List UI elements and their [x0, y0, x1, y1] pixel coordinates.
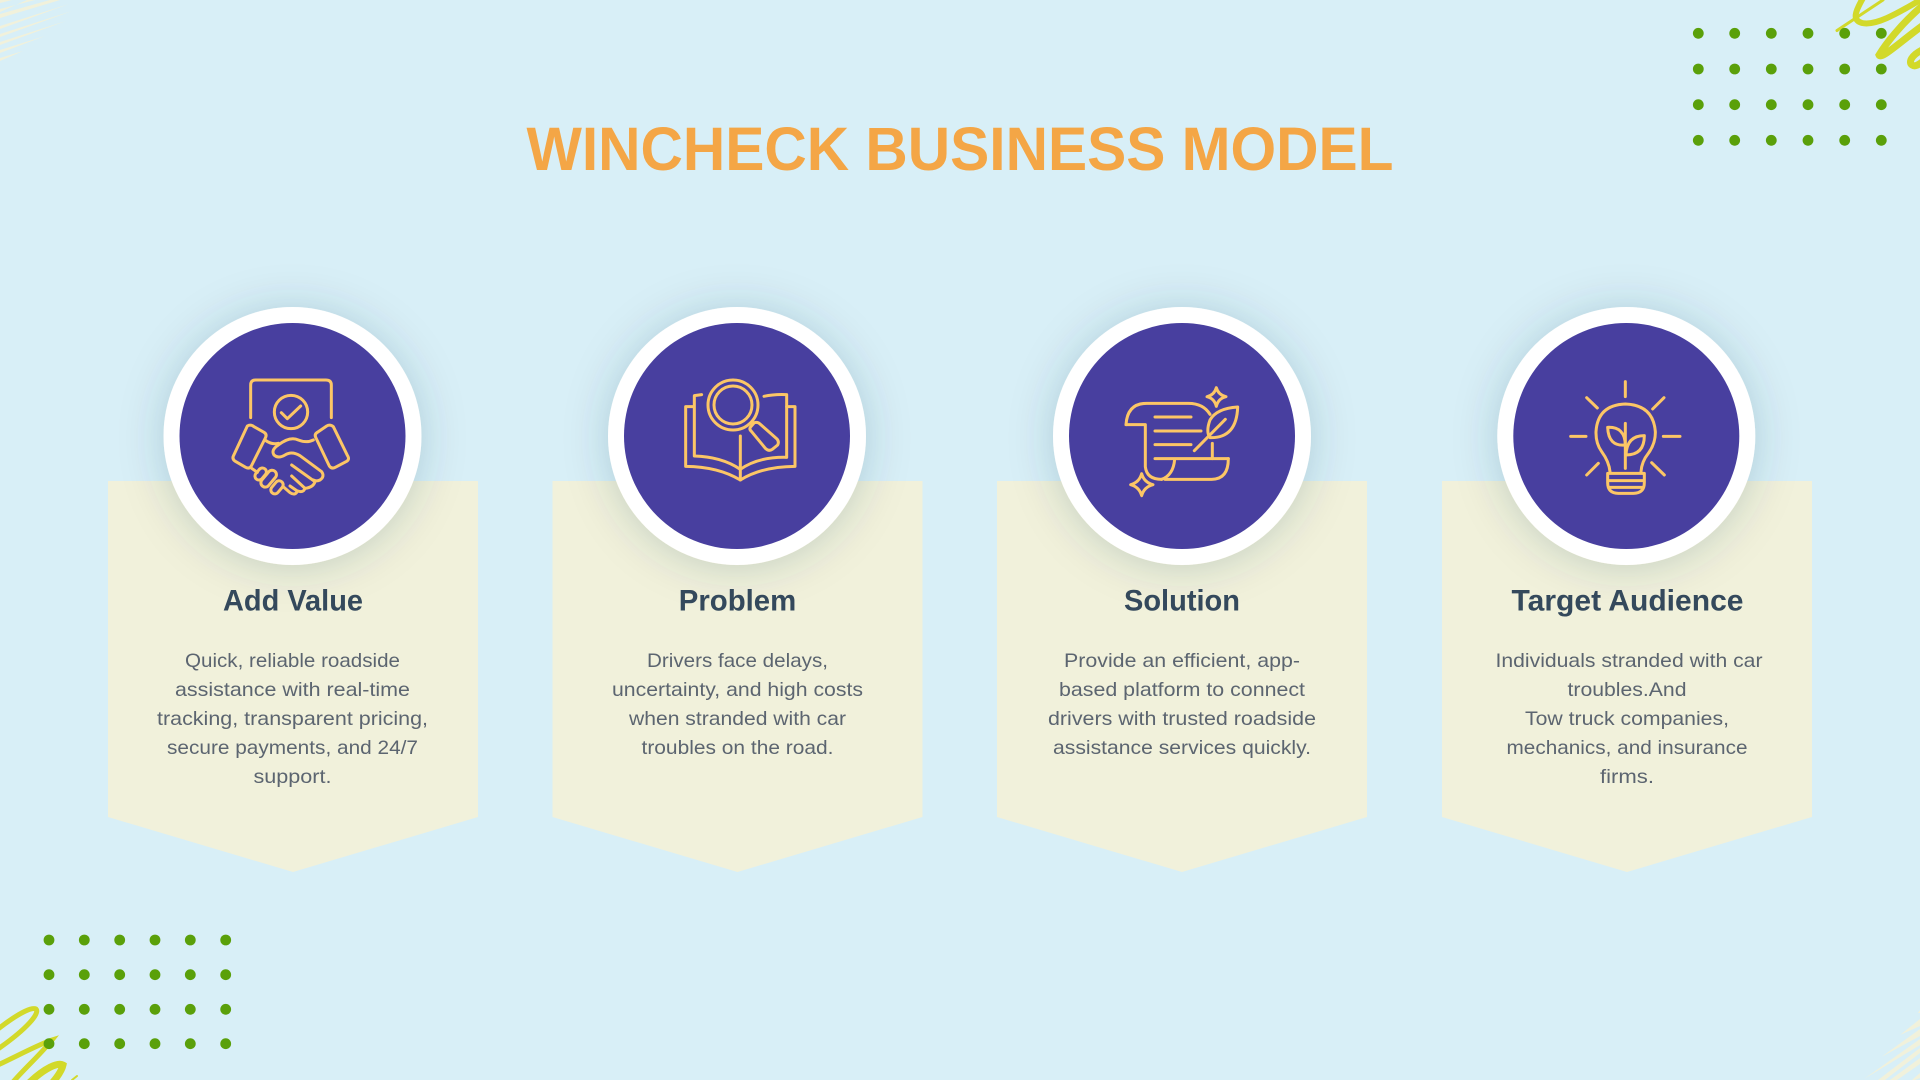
decoration: bottom-left yellow scribble: [0, 1009, 77, 1080]
body text: [157, 650, 428, 788]
heading: Add Value: [223, 584, 363, 618]
dot grid: top right: [1693, 28, 1887, 146]
panel: Solution: [997, 307, 1367, 872]
body text: [1496, 650, 1763, 788]
body text: Individuals stranded with car: [1496, 650, 1763, 672]
decoration: top-right yellow scribble: [1837, 0, 1920, 66]
body text: mechanics, and insurance: [1506, 737, 1748, 759]
decoration: top-left cream streaks: [0, 0, 72, 61]
panel background: [108, 481, 478, 872]
body text: assistance with real-time: [175, 679, 410, 701]
panel: Target Audience: [1442, 307, 1812, 872]
body text: troubles.And: [1568, 679, 1686, 701]
body text: troubles on the road.: [642, 737, 834, 759]
body text: Provide an efficient, app-: [1064, 650, 1300, 672]
title: WINCHECK BUSINESS MODEL: [526, 115, 1394, 183]
body text: drivers with trusted roadside: [1048, 708, 1316, 730]
icon badge: book and magnifier: [608, 307, 866, 565]
body text: Quick, reliable roadside: [185, 650, 400, 672]
body text: secure payments, and 24/7: [167, 737, 418, 759]
heading: Problem: [679, 584, 796, 618]
panel background: [1442, 481, 1812, 872]
dot grid: bottom left: [44, 935, 231, 1049]
icon badge: scroll and quill: [1053, 307, 1311, 565]
body text: assistance services quickly.: [1053, 737, 1311, 759]
body text: Tow truck companies,: [1525, 708, 1729, 730]
body text: firms.: [1600, 766, 1654, 788]
panel: Add Value: [108, 307, 478, 872]
body text: based platform to connect: [1059, 679, 1306, 701]
body text: Drivers face delays,: [647, 650, 828, 672]
body text: [612, 650, 863, 759]
panel background: [552, 481, 922, 872]
body text: support.: [254, 766, 332, 788]
decoration: bottom-right cream streaks: [1864, 1010, 1920, 1080]
body text: [1048, 650, 1316, 759]
panel: Problem: [552, 307, 922, 872]
icon badge: handshake: [164, 307, 422, 565]
body text: when stranded with car: [628, 708, 847, 730]
body text: tracking, transparent pricing,: [157, 708, 428, 730]
heading: Target Audience: [1512, 584, 1744, 618]
panel background: [997, 481, 1367, 872]
heading: Solution: [1124, 584, 1240, 618]
icon badge: light bulb with plant: [1497, 307, 1755, 565]
body text: uncertainty, and high costs: [612, 679, 863, 701]
